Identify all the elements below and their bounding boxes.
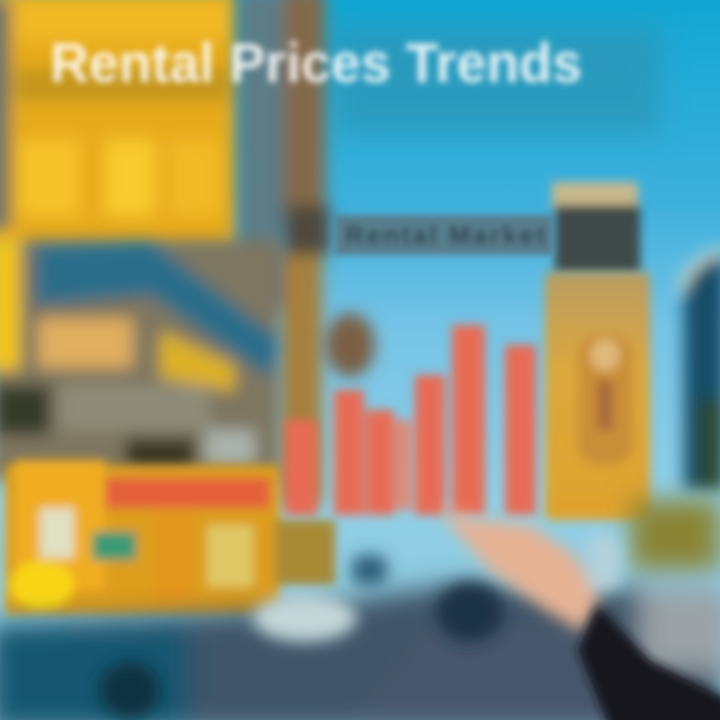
yellow tower building	[0, 0, 238, 252]
chart: red bars	[285, 325, 536, 515]
dark tower columns	[238, 0, 330, 505]
yellow shops row	[5, 460, 335, 615]
golden tower with price panel	[545, 182, 650, 520]
title backing panel	[335, 28, 660, 133]
tower body	[545, 272, 650, 520]
black sleeve	[578, 605, 720, 720]
dark right building	[680, 250, 720, 490]
mid grey band label: Rental Market	[345, 220, 545, 250]
mid grey band label	[335, 215, 553, 255]
street ground	[0, 500, 720, 720]
title: Rental Prices Trends	[50, 31, 582, 94]
hand pointing at chart	[438, 510, 621, 632]
tower cap	[552, 182, 640, 273]
left storefront building	[0, 240, 280, 480]
car	[100, 555, 504, 718]
building shadow behind chart	[325, 313, 375, 377]
